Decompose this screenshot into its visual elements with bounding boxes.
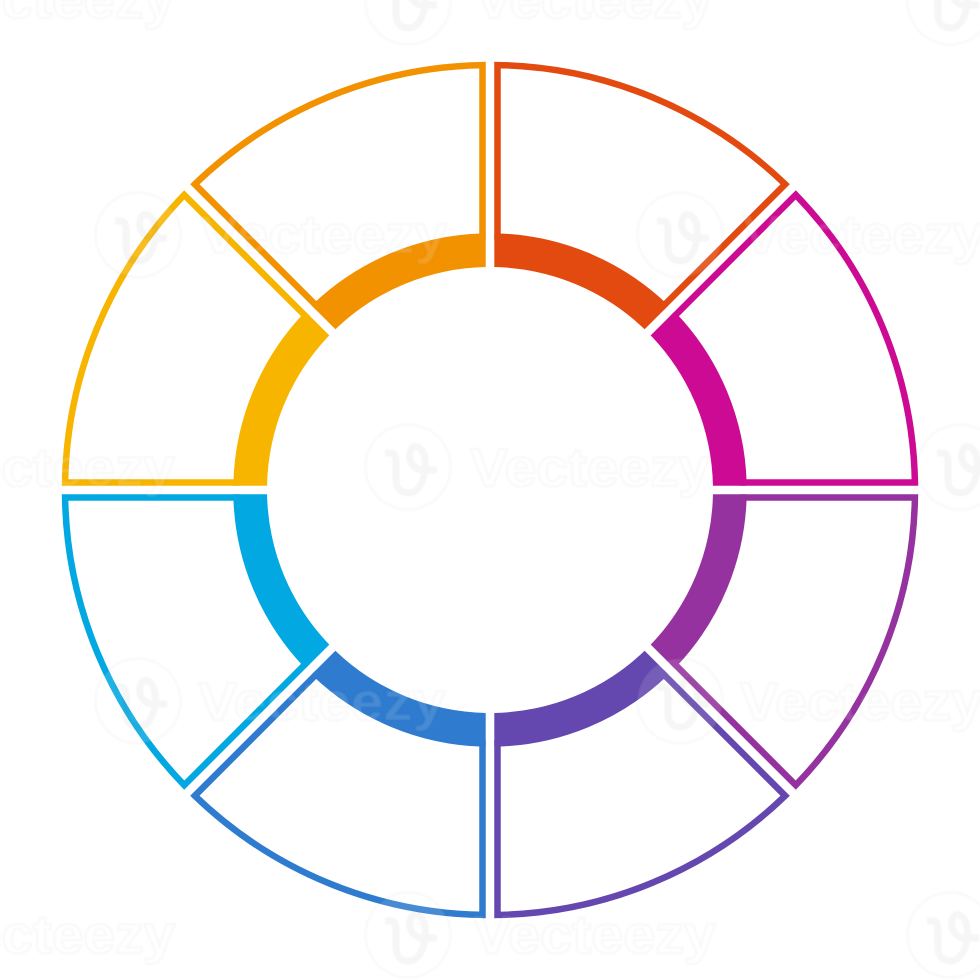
watermark pattern: Vecteezy xyxy=(200,205,447,265)
segment: left upper, yellow xyxy=(65,195,329,486)
segment: right upper, magenta xyxy=(651,195,915,486)
watermark pattern: Vecteezy xyxy=(470,438,710,498)
watermark pattern: Vecteezy xyxy=(740,672,980,732)
segment: bottom right, violet xyxy=(494,651,785,915)
segment: top left, orange xyxy=(195,65,486,329)
watermark pattern: Vecteezy xyxy=(198,672,445,732)
segment: right lower, purple xyxy=(651,494,915,785)
segment: top right, red-orange xyxy=(494,65,785,329)
segment: left lower, cyan xyxy=(65,494,329,785)
watermark pattern: Vecteezy xyxy=(473,905,716,965)
segment: bottom left, blue xyxy=(195,651,486,915)
watermark pattern: Vecteezy xyxy=(742,205,980,265)
ring diagram xyxy=(65,65,915,915)
